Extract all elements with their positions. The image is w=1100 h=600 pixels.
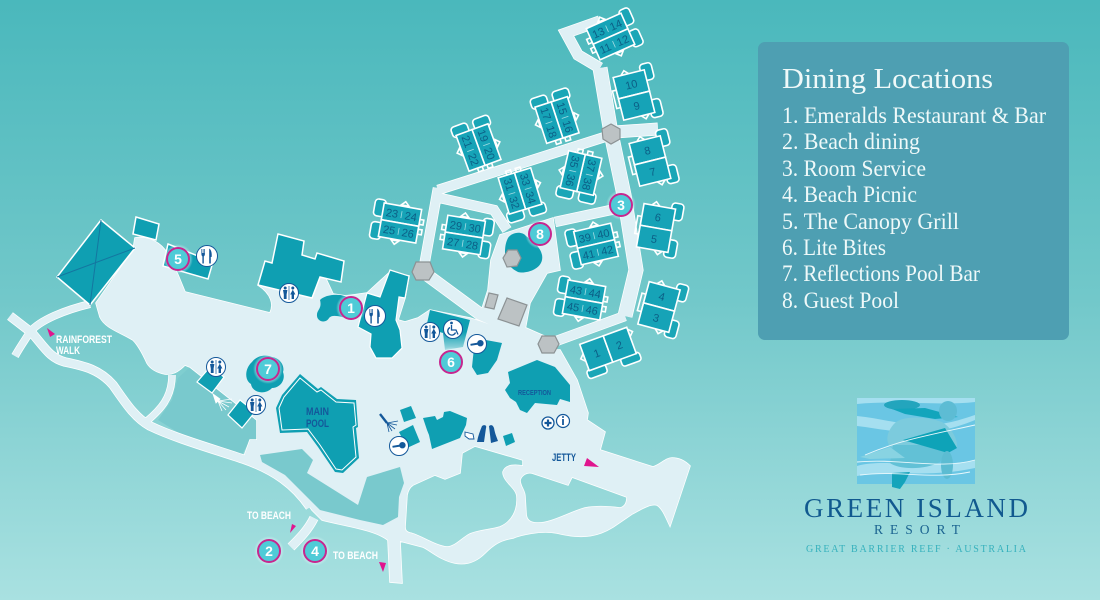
- building: west cluster: [258, 234, 344, 298]
- villa block 19 20 21 22: 21: [459, 134, 474, 150]
- hexagon: south junction: [538, 336, 559, 353]
- icon: toilets west cluster: [280, 284, 298, 302]
- villa block 8 7: [624, 128, 680, 192]
- location markers: [163, 190, 636, 566]
- villa block 19 20 21 22: 22: [465, 152, 481, 167]
- hexagon: north junction: [602, 124, 620, 144]
- list: dining locations: 2. Beach dining: [782, 129, 920, 154]
- villa block 13 14 11 12: 11: [598, 41, 613, 57]
- building: shower block: [399, 425, 420, 448]
- marker 6: 6: [447, 354, 455, 370]
- guest pool: [505, 233, 542, 272]
- villa block 31 32 33 34: 31: [501, 177, 516, 192]
- main pool: [276, 374, 359, 473]
- list: dining locations: 8. Guest Pool: [782, 288, 899, 313]
- marker 8: 8: [536, 226, 544, 242]
- villa block 15 16 17 18: 18: [543, 124, 558, 140]
- villa block 1 2: 2: [615, 339, 625, 353]
- marker 2: 2: [265, 543, 273, 559]
- villa block 43 44 45 46: 44: [588, 287, 602, 301]
- villa block 31 32 33 34: [492, 163, 549, 224]
- building: emeralds blob: [317, 295, 352, 321]
- marker 5: [163, 244, 193, 274]
- villa block 31 32 33 34: 32: [506, 195, 521, 210]
- villa block 13 14 11 12: 14: [608, 18, 624, 34]
- list: dining locations: 5. The Canopy Grill: [782, 209, 959, 234]
- building: reception: [505, 360, 570, 413]
- villa block 35 36 37 38: 38: [579, 177, 593, 191]
- icon: shower white: [213, 394, 232, 411]
- marker 4: 4: [311, 543, 319, 559]
- villa block 10 9: 10: [624, 78, 639, 93]
- villa block 4 3: [633, 275, 689, 339]
- label: jetty: JETTY: [552, 452, 576, 464]
- villa block 39 40 41 42: 42: [600, 244, 615, 258]
- villa block 35 36 37 38: [553, 146, 608, 205]
- marker 5: 5: [174, 251, 182, 267]
- villa block 23 24 25 26: 26: [401, 227, 415, 241]
- map labels and arrows: [47, 328, 599, 572]
- villa block 4 3: 4: [657, 291, 666, 304]
- villa block 29 30 27 28: 29: [449, 219, 463, 233]
- villa block 23 24 25 26: 23: [385, 207, 399, 221]
- panel: dining locations: [758, 42, 1069, 340]
- building: pool bar blob: [246, 356, 284, 392]
- villa block 13 14 11 12: 12: [615, 33, 631, 49]
- villa block 43 44 45 46: 45: [566, 301, 580, 315]
- garden patch: south: [260, 449, 404, 525]
- villa block 23 24 25 26: 25: [382, 224, 396, 238]
- building: canopy kiosk: [133, 217, 159, 240]
- list: dining locations: 1. Emeralds Restaurant & Bar: [782, 103, 1046, 128]
- villa block 35 36 37 38: 37: [583, 158, 598, 173]
- icon: toilets lite bites: [420, 322, 440, 342]
- villa block 39 40 41 42: 39: [578, 232, 592, 246]
- icon: cutlery emeralds: [364, 306, 386, 326]
- arrow: to beach west: [290, 524, 296, 533]
- villa block 31 32 33 34: 33: [517, 172, 532, 187]
- marker 7: 7: [264, 361, 272, 377]
- hexagon: west junction: [412, 262, 434, 280]
- villa block 15 16 17 18: 15: [554, 101, 569, 116]
- marker 1: [336, 293, 366, 323]
- buildings: [57, 217, 570, 473]
- villa block 31 32 33 34: 34: [522, 190, 537, 206]
- villa block 15 16 17 18: 17: [537, 106, 553, 122]
- villa block 1 2: [576, 326, 643, 380]
- villa block 15 16 17 18: [527, 87, 585, 149]
- marker 6: [436, 347, 466, 377]
- icon: cutlery canopy grill: [196, 246, 218, 266]
- villa block 35 36 37 38: 35: [567, 154, 581, 169]
- villa block 39 40 41 42: 41: [582, 248, 596, 263]
- icon: shower navy: [380, 414, 398, 432]
- building: pool toilets: [228, 400, 255, 428]
- hexagon: pool pavilion: [503, 250, 521, 267]
- villa block 19 20 21 22: [448, 114, 507, 177]
- villa block 8 7: 8: [643, 145, 652, 158]
- icon: key lite bites: [468, 334, 486, 354]
- grey square: small store: [485, 293, 498, 309]
- villa block 1 2: 1: [592, 347, 602, 361]
- villa block 35 36 37 38: 36: [562, 173, 577, 187]
- villa block 29 30 27 28: 28: [465, 239, 479, 253]
- villa block 39 40 41 42: [564, 217, 623, 272]
- villa block 15 16 17 18: 16: [559, 119, 575, 134]
- label: to beach west: TO BEACH: [247, 510, 291, 522]
- garden patch: west: [158, 367, 257, 455]
- logo: resort: RESORT: [874, 522, 961, 537]
- logo: tagline: GREAT BARRIER REEF · AUSTRALIA: [806, 544, 1027, 555]
- villa block 10 9: [608, 62, 664, 126]
- grey structures: [412, 124, 620, 353]
- label: main pool: MAIN: [306, 406, 329, 418]
- villa block 23 24 25 26: 24: [404, 210, 418, 224]
- building: west toilets: [197, 367, 224, 393]
- label: to beach east: TO BEACH: [333, 550, 378, 562]
- icon: information: [556, 414, 570, 428]
- logo: green island resort: [804, 398, 1028, 555]
- villa block 6 5: 6: [654, 212, 662, 225]
- icon: fins: [477, 425, 498, 443]
- villa block 29 30 27 28: 30: [468, 222, 482, 236]
- label: main pool: POOL: [306, 418, 329, 430]
- marker 1: 1: [347, 300, 355, 316]
- building: dive shop: [423, 411, 467, 449]
- marker 3: 3: [617, 197, 625, 213]
- list: dining locations: 6. Lite Bites: [782, 235, 886, 260]
- marker 2: [254, 536, 284, 566]
- villa block 43 44 45 46: 43: [569, 284, 583, 298]
- list: dining locations: 7. Reflections Pool Bar: [782, 261, 980, 286]
- villa block 6 5: 5: [650, 233, 658, 246]
- villas: [369, 5, 689, 380]
- villa block 43 44 45 46: 46: [585, 304, 599, 318]
- villa block 10 9: 9: [632, 100, 641, 113]
- map icons: [196, 246, 570, 456]
- marker 7: [253, 354, 283, 384]
- villa block 43 44 45 46: [553, 273, 610, 326]
- arrow: rainforest walk: [47, 328, 55, 337]
- icon: first aid: [542, 417, 554, 429]
- building: pavilion: [57, 220, 135, 305]
- building: small store: [503, 433, 515, 446]
- icon: wheelchair: [444, 320, 462, 338]
- villa block 19 20 21 22: 19: [475, 128, 490, 144]
- map: island land and paths: [10, 21, 690, 583]
- villa block 29 30 27 28: 27: [446, 236, 460, 250]
- land outline: [10, 21, 690, 583]
- villa block 19 20 21 22: 20: [481, 146, 497, 162]
- icon: toilets pool: [246, 396, 266, 414]
- logo: turtle artwork: [857, 398, 975, 489]
- label: rainforest walk: WALK: [56, 345, 80, 357]
- heading: dining locations: Dining Locations: [782, 64, 993, 95]
- land fill: [10, 21, 690, 583]
- icon: snorkel mask: [465, 432, 474, 439]
- icon: key dive shop: [390, 436, 408, 456]
- marker 4: [300, 536, 330, 566]
- icon: toilets west: [206, 358, 226, 376]
- building: lite bites: [426, 310, 470, 350]
- building: canopy grill: [163, 244, 213, 279]
- villa block 23 24 25 26: [369, 196, 426, 249]
- villa block 39 40 41 42: 40: [596, 227, 611, 242]
- grey square: pool amenities: [498, 298, 527, 326]
- marker 8: [525, 219, 555, 249]
- logo: name: GREEN ISLAND: [804, 493, 1028, 523]
- list: dining locations: 3. Room Service: [782, 156, 926, 181]
- villa block 8 7: 7: [648, 166, 657, 179]
- villa block 29 30 27 28: [438, 210, 495, 261]
- villa block 13 14 11 12: [581, 5, 645, 66]
- villa block 6 5: [632, 197, 684, 259]
- arrow: jetty: [584, 458, 599, 467]
- list: dining locations: [782, 103, 1046, 313]
- building: key office: [472, 338, 502, 375]
- marker 3: [606, 190, 636, 220]
- arrow: to beach east: [379, 562, 386, 572]
- building: emeralds restaurant: [358, 270, 409, 358]
- villa block 13 14 11 12: 13: [591, 26, 607, 41]
- list: dining locations: 4. Beach Picnic: [782, 182, 917, 207]
- label: reception: RECEPTION: [518, 388, 551, 397]
- villa block 4 3: 3: [651, 312, 660, 325]
- label: rainforest walk: RAINFOREST: [56, 334, 112, 346]
- building: small hut: [400, 406, 416, 422]
